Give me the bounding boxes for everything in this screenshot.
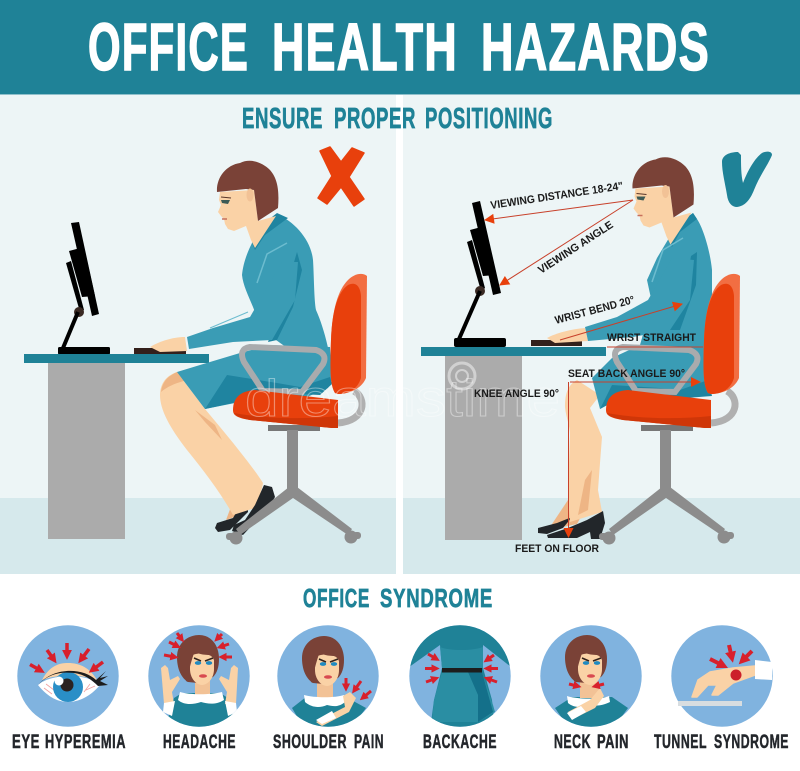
icon: red cross [318,147,364,206]
monitor [58,222,110,354]
posture measurement arrows [485,200,703,537]
subtitle: ensure proper positioning [242,103,553,135]
posture labels: VIEWING DISTANCE 18-24" [490,180,624,212]
keyboard [531,340,582,346]
icon: neck pain [540,625,642,730]
panel: incorrect posture [0,95,396,574]
posture labels: WRIST STRAIGHT [607,332,696,344]
caption: shoulder pain: PAIN [354,732,384,753]
watermark: dreamstime [245,370,560,428]
subtitle: ensure proper positioning: ENSURE [242,103,323,135]
desk [24,354,209,539]
title: OFFICE [88,10,249,85]
caption: neck pain: PAIN [597,732,629,753]
icon: backache [409,625,511,727]
caption: tunnel syndrome [654,732,789,753]
subtitle: ensure proper positioning: POSITIONING [425,103,553,135]
keyboard [134,348,186,354]
office chair [599,274,740,544]
heading: office syndrome: SYNDROME [380,583,493,613]
desk [421,347,606,540]
icon: headache [148,625,250,730]
icon: tunnel syndrome [671,625,773,727]
monitor [454,201,506,347]
icon: eye hyperemia [17,625,119,727]
subtitle: ensure proper positioning: PROPER [334,103,416,135]
heading: office syndrome [303,583,493,613]
caption: eye hyperemia: EYE [12,732,40,753]
woman slouching [150,161,332,535]
caption: backache: BACKACHE [423,732,497,753]
caption: headache: HEADACHE [163,732,236,753]
heading: office syndrome: OFFICE [303,583,370,613]
posture labels: WRIST BEND 20° [554,294,636,327]
caption: eye hyperemia [12,732,126,753]
icon: teal check [722,152,772,207]
caption: tunnel syndrome: TUNNEL [654,732,707,753]
header band [0,0,800,94]
title: HEALTH [272,10,458,85]
office chair [226,274,367,544]
posture labels: KNEE ANGLE 90° [474,388,559,400]
title [88,10,710,85]
caption: shoulder pain: SHOULDER [273,732,347,753]
posture labels: FEET ON FLOOR [515,543,599,555]
posture labels: SEAT BACK ANGLE 90° [568,368,685,380]
panel: correct posture [245,95,800,574]
posture labels [474,180,696,555]
woman seated correctly [538,157,712,539]
posture labels: VIEWING ANGLE [536,219,616,277]
icon: shoulder pain [277,625,379,730]
caption: eye hyperemia: HYPEREMIA [45,732,126,753]
caption: neck pain: NECK [554,732,591,753]
